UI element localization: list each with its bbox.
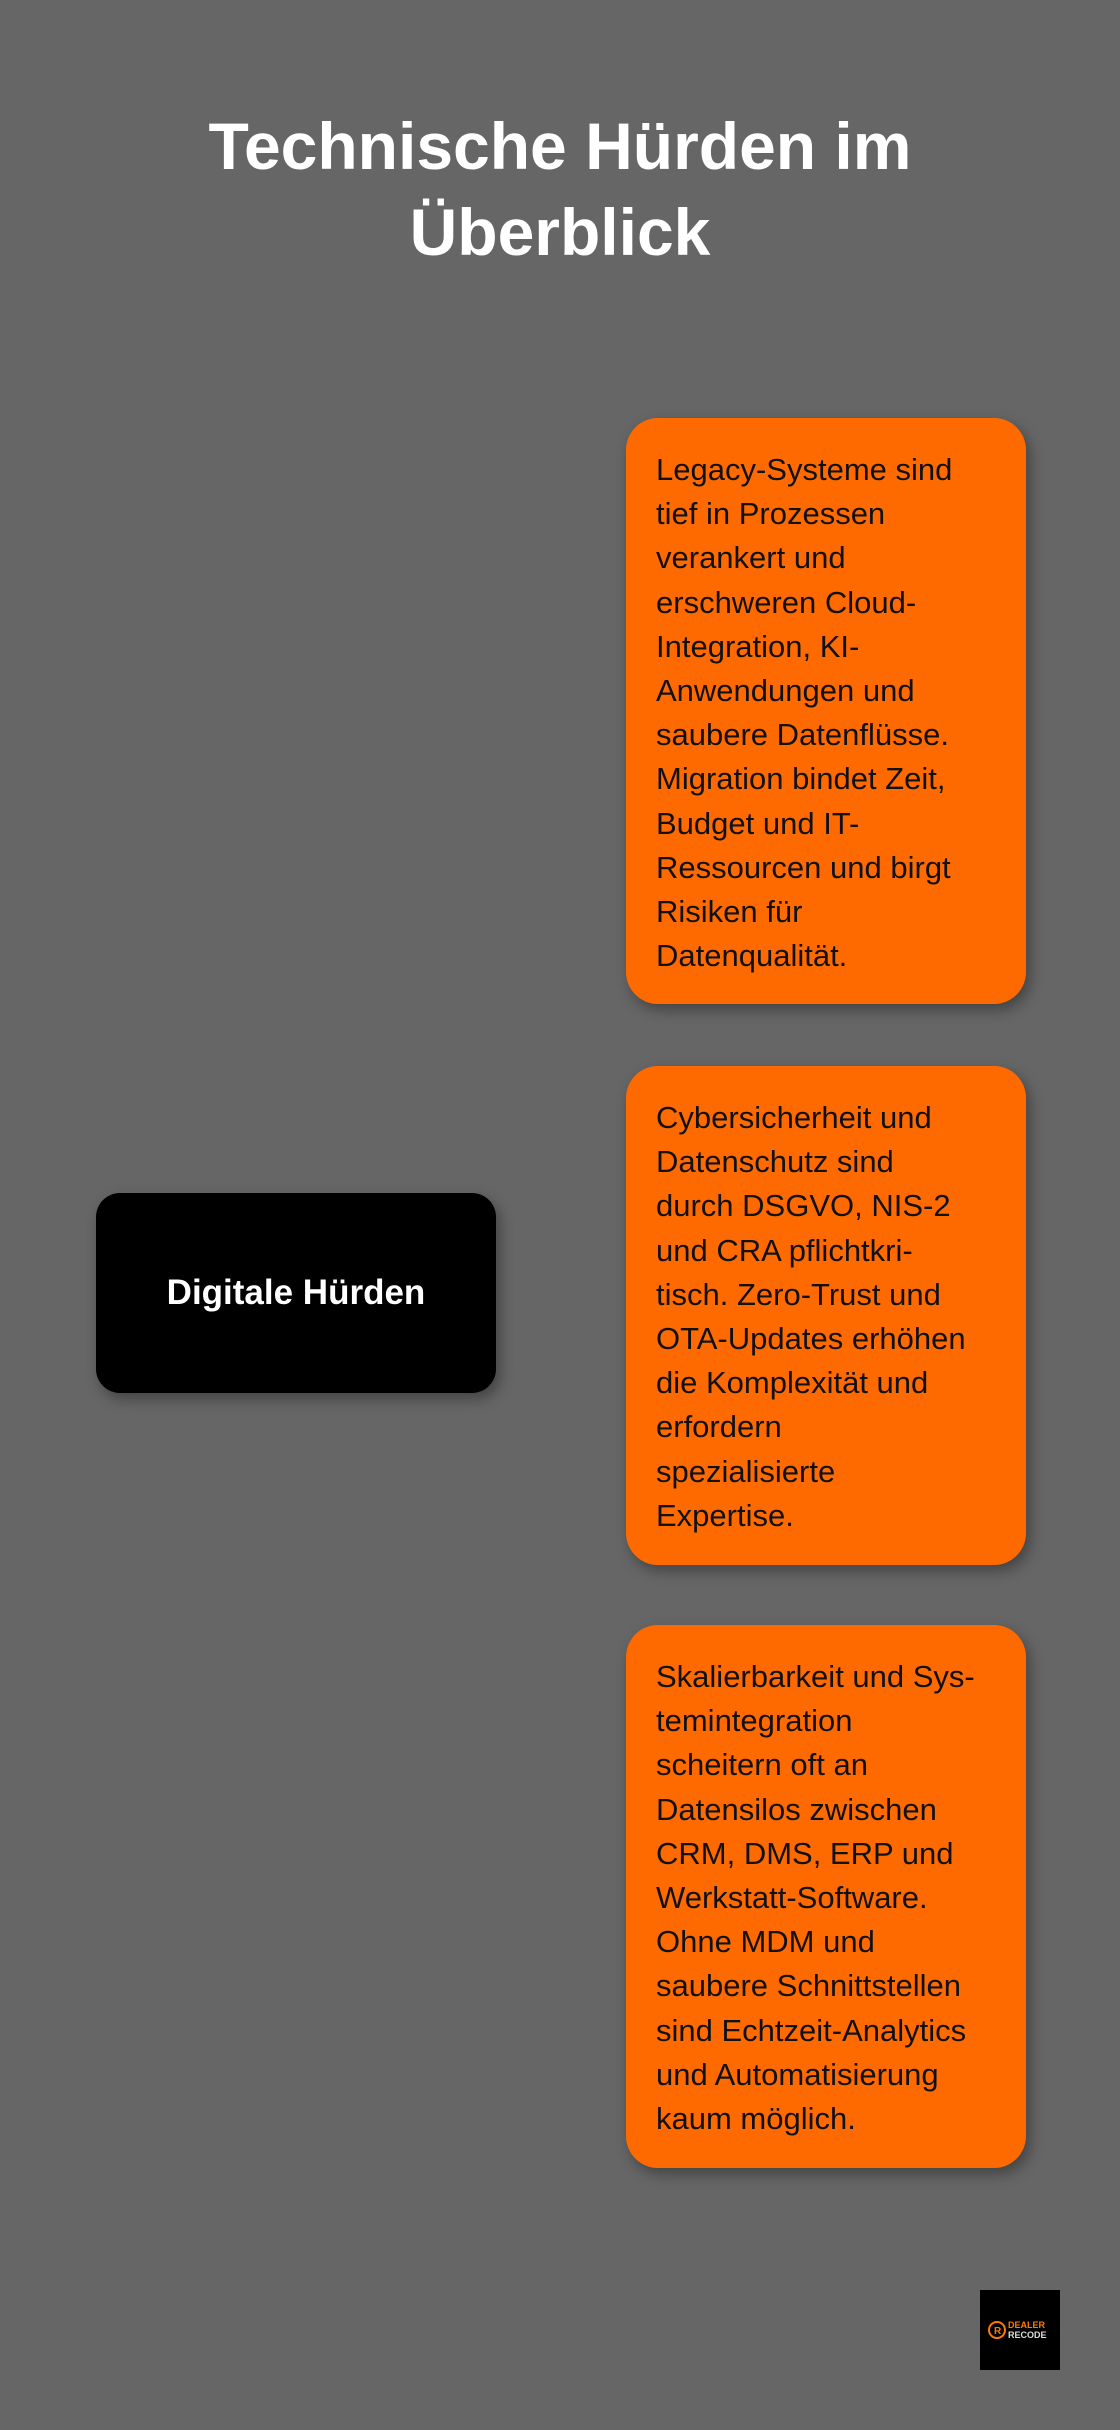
card: cybersecurity [626, 1066, 1026, 1565]
title: Überblick [410, 195, 710, 269]
card: legacy systems [626, 418, 1026, 1004]
card: scalability: Werkstatt-Software. [656, 1880, 928, 1915]
card: scalability: und Automatisierung [656, 2057, 939, 2092]
card: scalability: Datensilos zwischen [656, 1792, 937, 1827]
card: legacy systems: tief in Prozessen [656, 496, 885, 531]
card: legacy systems: saubere Datenflüsse. [656, 717, 949, 752]
card: cybersecurity: OTA-Updates erhöhen [656, 1321, 966, 1356]
card: cybersecurity: tisch. Zero-Trust und [656, 1277, 941, 1312]
card: cybersecurity: Cybersicherheit und [656, 1100, 932, 1135]
card: cybersecurity: Datenschutz sind [656, 1144, 894, 1179]
logo: Dealer Recode: RECODE [1008, 2330, 1047, 2340]
card: scalability: Ohne MDM und [656, 1924, 875, 1959]
card: legacy systems: Legacy-Systeme sind [656, 452, 952, 487]
card: cybersecurity: spezialisierte [656, 1454, 835, 1489]
card: legacy systems: Migration bindet Zeit, [656, 761, 945, 796]
central node: Digitale Hürden [96, 1193, 496, 1393]
card: legacy systems: Integration, KI- [656, 629, 859, 664]
card: legacy systems: Budget und IT- [656, 806, 859, 841]
card: legacy systems: erschweren Cloud- [656, 585, 916, 620]
title [209, 109, 911, 269]
central node: Digitale Hürden: Digitale Hürden [167, 1273, 425, 1312]
title: Technische Hürden im [209, 109, 911, 183]
card: cybersecurity: und CRA pflichtkri- [656, 1233, 913, 1268]
card: scalability: temintegration [656, 1703, 852, 1738]
logo: Dealer Recode: DEALER [1008, 2320, 1046, 2330]
card: legacy systems: Ressourcen und birgt [656, 850, 951, 885]
card: legacy systems: Risiken für [656, 894, 802, 929]
card: scalability: kaum möglich. [656, 2101, 856, 2136]
card: cybersecurity: die Komplexität und [656, 1365, 928, 1400]
card: scalability: scheitern oft an [656, 1747, 868, 1782]
card: scalability: CRM, DMS, ERP und [656, 1836, 953, 1871]
card: scalability [626, 1625, 1026, 2168]
card: scalability: saubere Schnittstellen [656, 1968, 961, 2003]
logo: Dealer Recode: R [994, 2326, 1002, 2337]
card: legacy systems: Anwendungen und [656, 673, 915, 708]
card: cybersecurity: erfordern [656, 1409, 782, 1444]
card: cybersecurity: Expertise. [656, 1498, 794, 1533]
card: legacy systems: verankert und [656, 540, 846, 575]
card: cybersecurity: durch DSGVO, NIS-2 [656, 1188, 951, 1223]
card: legacy systems: Datenqualität. [656, 938, 847, 973]
card: scalability: sind Echtzeit-Analytics [656, 2013, 966, 2048]
card: scalability: Skalierbarkeit und Sys- [656, 1659, 975, 1694]
logo: Dealer Recode [980, 2290, 1060, 2370]
